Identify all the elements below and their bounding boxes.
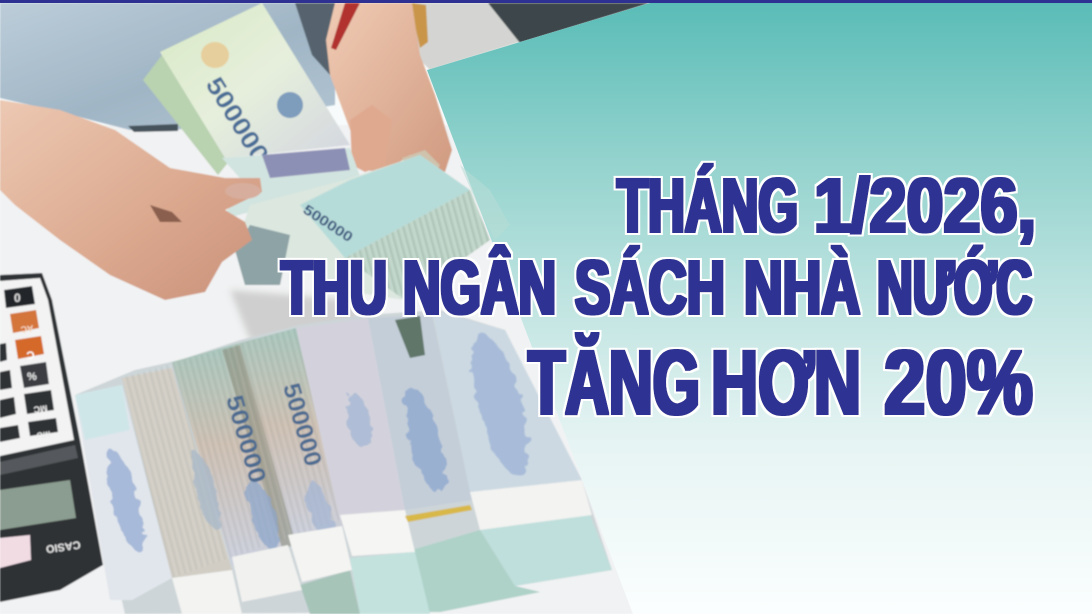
band 1 (172, 570, 242, 614)
title line 2: NHÀ (744, 244, 860, 331)
money stacks (75, 310, 612, 614)
seal on note (201, 42, 229, 68)
photo: hands counting banknotes (0, 3, 650, 614)
rubber band (405, 505, 472, 522)
stack base (75, 310, 612, 614)
button percent (20, 362, 49, 388)
denomination 3: 500000 (220, 392, 271, 486)
band 4 (340, 510, 415, 556)
stack 3 (172, 345, 270, 545)
stack 5 (300, 343, 340, 514)
title line 3: 20% (884, 332, 1033, 434)
button MC: MC (32, 403, 48, 415)
banknote fan (160, 3, 350, 158)
top navy bar (0, 0, 1092, 3)
gap between fingers (150, 205, 182, 222)
folded note print (262, 148, 350, 178)
blue tree prints (99, 330, 540, 554)
display (0, 480, 76, 530)
shirt sleeve (0, 3, 335, 130)
pink sticker (0, 535, 31, 568)
bundle page lines (345, 190, 490, 300)
bundle teal face (300, 155, 470, 258)
right hand (326, 3, 452, 172)
title line 3 (528, 332, 1033, 434)
button AC: AC (19, 323, 34, 335)
hand shadow (230, 288, 358, 338)
title line 2: SÁCH (575, 244, 725, 331)
brand: CASIO (45, 538, 81, 555)
button 0 (4, 286, 35, 308)
translucent note edge (460, 165, 510, 240)
stack 4 (232, 328, 340, 526)
lower fan bundle (244, 160, 406, 300)
title line 3: HƠN (711, 332, 861, 434)
watch (412, 3, 428, 48)
bundle back (235, 225, 290, 285)
cuff shadow (128, 124, 178, 132)
tree print 6 (460, 330, 540, 480)
band 5 (470, 480, 592, 530)
title line 1 (617, 162, 1036, 249)
button MU (28, 418, 58, 441)
button percent: % (27, 371, 37, 383)
title line 1: THÁNG (617, 162, 798, 249)
dark chair (488, 3, 650, 43)
right thumb (350, 106, 382, 172)
bundle pages (345, 190, 490, 300)
stack page lines (122, 328, 340, 578)
title line 3: TĂNG (528, 332, 700, 434)
bracelet red (331, 3, 360, 50)
tree print 4 (300, 478, 340, 542)
tree print 1 (99, 446, 151, 554)
button 0: 0 (14, 291, 21, 305)
stack 1 (75, 385, 172, 600)
denomination 4: 500000 (277, 380, 327, 469)
stack 2 (122, 368, 232, 578)
calculator body (0, 273, 103, 602)
band 3 (288, 526, 352, 582)
emblem on note (277, 92, 303, 118)
wedding ring (402, 150, 440, 168)
lower note faces 3 (350, 552, 430, 614)
thumbnail (225, 183, 261, 199)
calculator (0, 273, 103, 602)
teal gradient panel (427, 3, 1092, 614)
button MC (24, 390, 54, 415)
title line 2: THU (281, 245, 387, 331)
button C: C (26, 348, 35, 361)
table surface (0, 125, 650, 614)
stack 7 (432, 310, 582, 492)
left column buttons (0, 343, 20, 442)
tree print 5 (396, 383, 454, 497)
stack 1 teal top (75, 385, 130, 440)
left hand (0, 100, 262, 300)
title (281, 162, 1036, 434)
dark edge stack 6 (395, 316, 425, 358)
banknote fan back (143, 55, 230, 175)
dark side stack 3 (222, 345, 296, 548)
oval print (341, 390, 375, 450)
button MU: MU (36, 429, 51, 441)
lower note faces 2 (405, 530, 540, 612)
lower note faces (480, 515, 612, 586)
title line 2 (281, 244, 1032, 331)
band 2 (232, 545, 302, 602)
tree print 3 (240, 477, 286, 553)
calculator face (0, 278, 74, 456)
note denomination: 500000 (200, 72, 274, 168)
calculator lower (0, 445, 78, 475)
title line 1: 1/2026, (814, 163, 1036, 249)
button C (15, 336, 44, 361)
folded note (220, 148, 362, 220)
tree print 2 (186, 451, 224, 529)
title line 2: NGÂN (403, 244, 556, 331)
lower note faces 4 (300, 570, 360, 614)
dark gap behind notes (294, 3, 336, 75)
background wall (416, 3, 520, 70)
stack 6 (368, 315, 472, 510)
button AC (10, 310, 39, 335)
bundle denomination: 500000 (300, 201, 356, 245)
